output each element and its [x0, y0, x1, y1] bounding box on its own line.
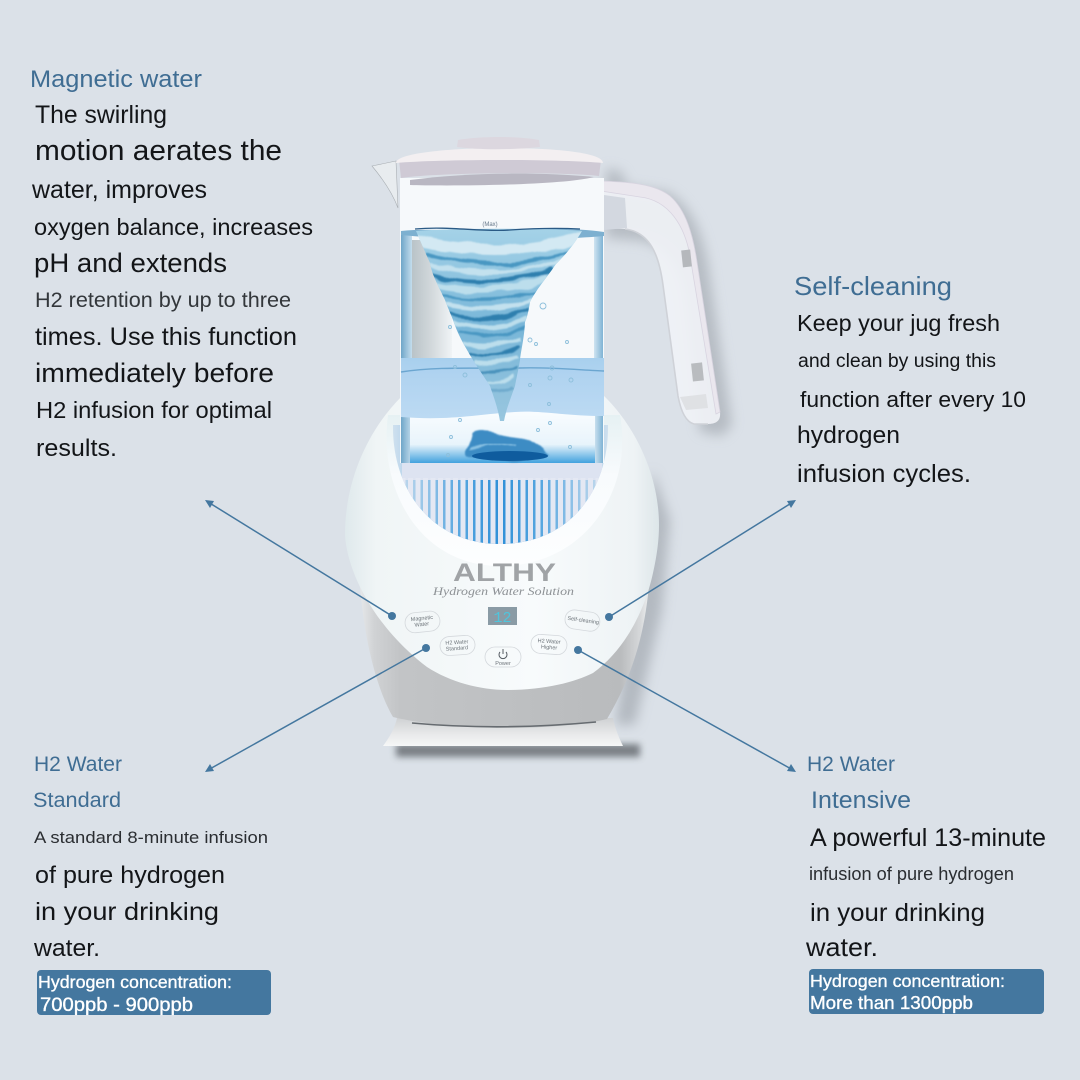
water surface dark crest	[415, 228, 580, 230]
control buttons	[404, 609, 601, 667]
button labels: Standard	[446, 645, 468, 653]
callout: intensive concentration: Hydrogen concentration:	[810, 971, 1005, 991]
description: H2 water standard: A standard 8-minute infusion	[34, 828, 268, 847]
description: H2 water intensive	[805, 824, 1046, 962]
base plate	[383, 718, 623, 746]
heading: H2 water intensive: Intensive	[811, 787, 911, 814]
description: H2 water standard: water.	[33, 935, 100, 962]
heading: magnetic water: Magnetic water	[30, 66, 202, 93]
description: magnetic water	[31, 101, 313, 462]
description: magnetic water: water, improves	[31, 176, 207, 204]
heading: H2 water standard	[33, 753, 122, 812]
heading: H2 water standard: H2 Water	[34, 753, 122, 776]
text block: self-cleaning	[794, 271, 1026, 488]
arrow: H2 water intensive	[574, 646, 796, 772]
button labels: H2 Water	[537, 638, 561, 646]
digital display	[488, 607, 517, 627]
description: magnetic water: times. Use this function	[35, 323, 297, 351]
callout: standard concentration	[37, 970, 271, 1016]
jug spout	[372, 161, 398, 208]
description: magnetic water: H2 infusion for optimal	[36, 397, 272, 423]
water surface	[401, 229, 604, 240]
text block: H2 water intensive	[805, 753, 1046, 1014]
jug handle	[601, 181, 720, 424]
text block: H2 water standard	[33, 753, 271, 1016]
description: self-cleaning: Keep your jug fresh	[797, 310, 1000, 336]
description: H2 water intensive: infusion of pure hydrogen	[809, 864, 1014, 884]
heading: H2 water standard: Standard	[33, 789, 121, 812]
description: self-cleaning: and clean by using this	[798, 351, 996, 372]
button labels	[410, 615, 599, 667]
product: hydrogen water jug on base	[345, 137, 732, 757]
jug glass body and water	[400, 178, 604, 463]
bubbles	[446, 303, 573, 456]
description: H2 water intensive: water.	[805, 932, 878, 962]
heading: H2 water intensive	[807, 753, 911, 814]
jug lid band	[399, 160, 601, 178]
arrow: self-cleaning	[605, 500, 796, 621]
description: H2 water standard: in your drinking	[35, 898, 219, 926]
lid knob	[457, 137, 540, 149]
description: magnetic water: immediately before	[35, 358, 274, 388]
callout: intensive concentration: More than 1300ppb	[810, 993, 973, 1013]
description: magnetic water: pH and extends	[34, 248, 227, 278]
description: self-cleaning	[797, 310, 1026, 488]
jug lid	[396, 148, 603, 163]
brand logo: ALTHY	[453, 559, 556, 587]
description: magnetic water: motion aerates the	[35, 135, 282, 167]
digital display: 12	[493, 610, 512, 627]
description: H2 water intensive: A powerful 13-minute	[810, 824, 1046, 852]
water side strips	[401, 232, 412, 463]
water vortex	[410, 226, 585, 426]
brand logo	[432, 559, 574, 598]
description: H2 water standard: of pure hydrogen	[35, 862, 225, 889]
lower water splash	[467, 431, 550, 461]
cradle opening and filter	[393, 425, 608, 550]
cradle white ring	[387, 415, 622, 566]
jug and base shadows	[396, 168, 732, 757]
blue water band	[401, 358, 604, 418]
grey base lower body	[360, 585, 649, 728]
description: self-cleaning: hydrogen	[797, 422, 900, 449]
(Max) marker: (Max)	[482, 222, 498, 228]
condensation panel	[412, 240, 452, 358]
heading: self-cleaning: Self-cleaning	[794, 271, 952, 301]
heading: H2 water intensive: H2 Water	[807, 753, 895, 776]
callout: standard concentration: Hydrogen concentration:	[38, 972, 232, 992]
power icon	[499, 649, 507, 659]
description: magnetic water: oxygen balance, increases	[34, 214, 313, 240]
arrow: magnetic water	[205, 500, 396, 620]
brand logo: Hydrogen Water Solution	[432, 584, 574, 598]
description: magnetic water: results.	[36, 435, 117, 462]
callout: intensive concentration	[809, 969, 1044, 1014]
button labels: Water	[414, 621, 430, 629]
description: magnetic water: The swirling	[35, 101, 167, 129]
description: magnetic water: H2 retention by up to three	[35, 289, 291, 312]
white egg shell of base	[345, 394, 659, 690]
description: H2 water standard	[33, 828, 268, 962]
lower clear water	[410, 410, 595, 463]
button labels: Magnetic	[410, 615, 434, 623]
description: H2 water intensive: in your drinking	[810, 899, 985, 927]
button labels: Self-cleaning	[567, 616, 599, 626]
button labels: Higher	[541, 644, 558, 652]
description: self-cleaning: infusion cycles.	[797, 460, 971, 488]
button labels: Power	[495, 661, 511, 667]
description: self-cleaning: function after every 10	[800, 387, 1026, 412]
text block: magnetic water	[30, 66, 313, 462]
button labels: H2 Water	[445, 639, 469, 647]
callout: standard concentration: 700ppb - 900ppb	[40, 995, 193, 1016]
arrow: H2 water standard	[205, 644, 430, 772]
